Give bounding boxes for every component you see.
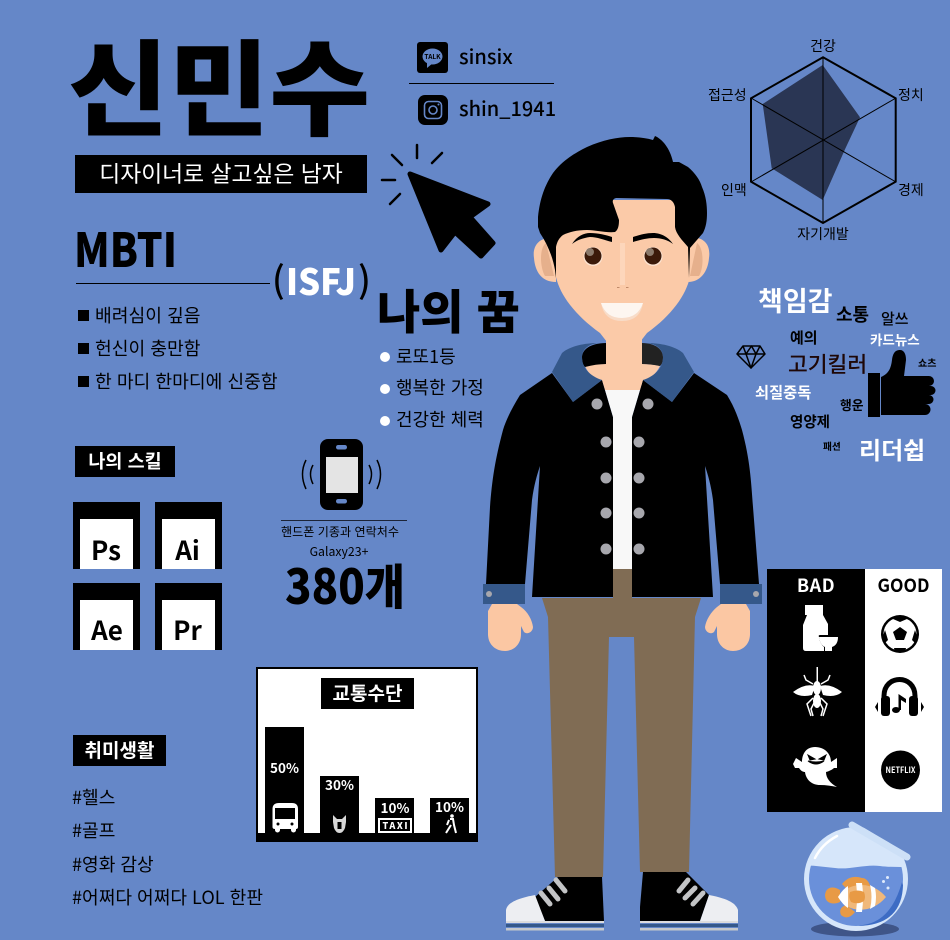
kakaotalk contact (417, 41, 513, 73)
radar chart: 자기개발 (797, 224, 849, 244)
instagram contact (418, 93, 556, 125)
bar: scooter 30% (320, 774, 359, 833)
icon: kakaotalk: TALK (424, 51, 441, 61)
icon: diamond (737, 346, 765, 368)
icon: Premiere: Pr (173, 611, 202, 648)
icon: mosquito (793, 667, 842, 716)
nose (617, 243, 628, 288)
jacket body and sleeves (486, 373, 759, 597)
MBTI traits list (78, 302, 278, 394)
MBTI traits list: 배려심이 깊음 (95, 302, 200, 328)
hobby list: #영화 감상 (72, 851, 154, 877)
bar: walking 10% (430, 796, 469, 833)
icon: ghost (793, 747, 837, 787)
icon: Photoshop (73, 502, 140, 569)
title: 신민수 (68, 6, 370, 157)
skill icons (73, 502, 222, 650)
dream list: 행복한 가정 (396, 374, 484, 400)
dream heading: 나의 꿈 (377, 274, 520, 343)
bar: walking 10%: 10% (435, 796, 464, 816)
icon: After Effects (73, 583, 140, 650)
word cloud: 영양제 (790, 411, 830, 432)
icon: mouse cursor (382, 145, 493, 256)
word cloud: 알쓰 (881, 308, 909, 329)
pants (542, 569, 701, 877)
icon: Illustrator (155, 502, 222, 569)
dream list: 건강한 체력 (396, 406, 484, 432)
right cuff (720, 584, 762, 604)
jacket collar (552, 343, 694, 402)
bar: bus 50% (265, 727, 304, 833)
skills heading: 나의 스킬 (88, 448, 162, 474)
hobby list: #어쩌다 어쩌다 LOL 한판 (72, 884, 263, 910)
MBTI type: ( (272, 254, 285, 306)
icon: instagram (418, 95, 448, 125)
right hand (705, 604, 750, 651)
icon: vibrating phone (302, 439, 380, 510)
subtitle banner: 디자이너로 살고싶은 남자 (99, 156, 343, 189)
icon: thumbs up (868, 350, 936, 417)
icon: Photoshop: Ps (91, 531, 121, 568)
panel: bad and good: BAD (797, 572, 835, 598)
word cloud: 고기킬러 (788, 348, 867, 379)
word cloud: 쇠질중독 (755, 381, 811, 403)
bar: taxi 10%: 10% (381, 797, 409, 817)
icon: After Effects: Ae (90, 611, 123, 648)
transport heading: 교통수단 (333, 679, 402, 706)
face (556, 200, 690, 342)
bubbles (882, 876, 890, 890)
eyes (584, 247, 662, 266)
MBTI rule (76, 283, 270, 284)
hobby heading (73, 735, 166, 766)
word cloud (737, 280, 936, 466)
phone stat (281, 439, 407, 618)
word cloud: 쇼츠 (918, 355, 936, 370)
icon: fish bowl (804, 825, 908, 936)
skills heading (75, 446, 175, 477)
left ear (534, 238, 556, 282)
word cloud: 리더쉽 (859, 431, 925, 466)
inner collar (582, 343, 663, 367)
bar: taxi 10%: TAXI (382, 819, 408, 832)
left sneaker (506, 877, 604, 930)
mouth (601, 303, 643, 321)
right sneaker (640, 872, 738, 930)
right ear (688, 238, 709, 282)
panel: bad and good (767, 569, 942, 812)
icon: soju bottle (803, 605, 838, 651)
hobby list: #골프 (72, 817, 115, 843)
MBTI traits list: 한 마디 한마디에 신중함 (95, 368, 278, 394)
icon: netflix badge: NETFLIX (886, 764, 916, 776)
transport heading (321, 678, 414, 709)
MBTI heading: MBTI (74, 212, 177, 281)
panel: bad and good: GOOD (878, 572, 930, 598)
MBTI traits list: 헌신이 충만함 (95, 335, 201, 361)
icon: netflix badge (881, 750, 920, 790)
icon: Premiere (155, 583, 222, 650)
bar: scooter 30%: 30% (325, 774, 354, 794)
word cloud: 소통 (836, 301, 869, 327)
dream list: 로또1등 (396, 343, 456, 369)
radar chart: 접근성 (708, 85, 747, 105)
word cloud: 패션 (823, 439, 841, 453)
phone stat: Galaxy23+ (310, 542, 369, 560)
left cuff (483, 584, 525, 604)
eyebrows (572, 233, 673, 244)
word cloud: 예의 (790, 327, 818, 348)
word cloud: 책임감 (758, 280, 833, 319)
shirt (605, 390, 640, 569)
hobby list: #헬스 (72, 784, 115, 810)
radar chart: 정치 (898, 85, 924, 105)
bar: taxi 10% (375, 797, 414, 833)
phone stat: 380개 (285, 548, 405, 618)
fish (825, 877, 886, 917)
radar chart (708, 36, 924, 244)
jacket buttons (592, 398, 654, 554)
radar chart: 경제 (898, 180, 924, 200)
icon: soccer ball (881, 615, 919, 653)
bar: bus 50%: 50% (270, 757, 299, 777)
MBTI type: ISFJ (286, 254, 356, 306)
radar chart: 건강 (810, 36, 836, 56)
hobby list (72, 784, 263, 910)
kakaotalk contact: sinsix (459, 41, 513, 70)
hair (538, 136, 707, 278)
dream list (380, 343, 484, 432)
character (483, 136, 762, 930)
left hand (488, 604, 533, 651)
word cloud: 행운 (840, 395, 864, 414)
radar chart: 인맥 (721, 180, 747, 200)
MBTI type: ) (358, 254, 371, 306)
word cloud: 카드뉴스 (870, 329, 920, 349)
icon: headphones with music note (875, 680, 924, 716)
neck (606, 325, 642, 385)
phone stat: 핸드폰 기종과 연락처수 (281, 523, 399, 540)
hobby heading: 취미생활 (85, 736, 154, 763)
icon: Illustrator: Ai (174, 531, 200, 568)
instagram contact: shin_1941 (459, 93, 556, 122)
chest skin (585, 364, 660, 390)
contact divider (409, 83, 554, 84)
panel: transport bar chart (256, 668, 478, 842)
